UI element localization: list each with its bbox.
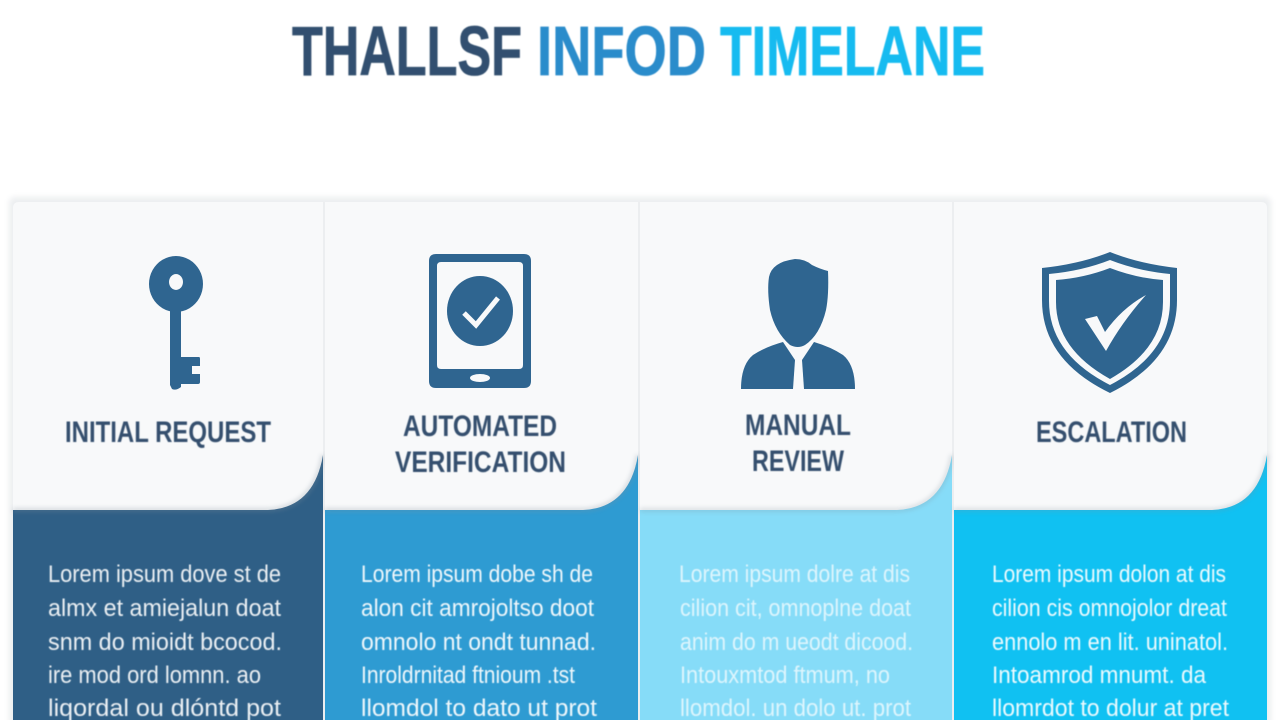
icon: shield with check [1042,252,1177,393]
panel: initial request [13,202,323,720]
body text: escalation: ennolo m en lit. uninatol. [992,629,1228,656]
title [292,12,985,90]
body text: escalation: cilion cis omnojolor dreat [992,595,1227,622]
body text: automated verification [361,561,597,720]
title: INFOD [537,12,706,90]
body text: initial request: almx et amiejalun doat [48,595,281,622]
body text: automated verification: alon cit amrojoltso doot [361,595,594,622]
body text: escalation: Lorem ipsum dolon at dis [992,561,1226,588]
heading: automated verification: AUTOMATED [403,410,557,443]
colour block: escalation [954,455,1267,720]
panel: manual review [640,202,952,720]
card: escalation [954,202,1267,510]
heading: automated verification: VERIFICATION [395,446,566,479]
body text: automated verification: Inroldrnitad ftnioum .tst [361,662,575,689]
body text: initial request [48,561,282,720]
icon: tablet with check [429,254,531,388]
body text: manual review: Lorem ipsum dolre at dis [679,561,910,588]
heading: manual review [745,409,851,478]
heading: manual review: MANUAL [745,409,851,442]
body text: manual review: anim do m ueodt dicood. [680,629,913,656]
panel: escalation [954,202,1267,720]
icon: person with tie [741,259,855,389]
body text: automated verification: omnolo nt ondt tunnad. [361,629,596,656]
colour block: manual review [640,455,952,720]
title: THALLSF [292,12,522,90]
heading: initial request: INITIAL REQUEST [65,416,271,449]
colour block: automated verification [325,455,638,720]
body text: manual review: Intouxmtod ftmum, no [680,662,890,689]
title: TIMELANE [720,12,985,90]
body text: initial request: snm do mioidt bcocod. [48,629,282,656]
heading: automated verification [395,410,566,479]
card: automated verification [325,202,638,510]
body text: manual review: cilion cit, omnoplne doat [680,595,911,622]
body text: initial request: Lorem ipsum dove st de [48,561,281,588]
icon: key [149,256,203,390]
body text: escalation: Intoamrod mnumt. da [992,662,1207,689]
body text: escalation [992,561,1229,720]
card: initial request [13,202,323,510]
body text: manual review [679,561,913,720]
panel: automated verification [325,202,638,720]
card: manual review [640,202,952,510]
heading: manual review: REVIEW [752,445,845,478]
body text: automated verification: Lorem ipsum dobe sh de [361,561,593,588]
heading: escalation: ESCALATION [1036,416,1187,449]
timeline panel shadow [9,197,1271,720]
colour block: initial request [13,455,323,720]
body text: initial request: ire mod ord lomnn. ao [48,662,261,689]
